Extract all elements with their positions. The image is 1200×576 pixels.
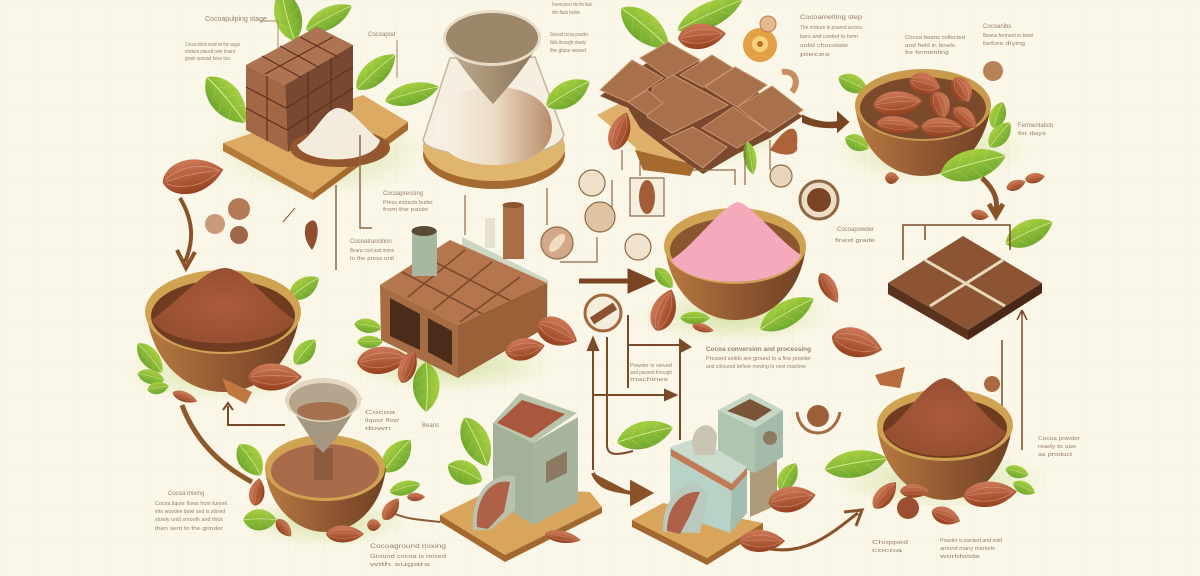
callout: block note: mixture placed over board [185, 49, 235, 55]
panel: bowl of beans [830, 61, 1046, 222]
icon: machine pods [739, 459, 818, 552]
icon: loose beans [885, 171, 1046, 222]
arrow: pod to left bowl [177, 198, 195, 268]
icon: press chimneys and pipes [462, 202, 548, 315]
callout: grinding note: Press extracts butter [383, 200, 433, 206]
callout: funnel note: the glass vessel [550, 48, 586, 54]
callout: bottom left note: down [365, 426, 391, 432]
arrow: press to pink bowl [579, 272, 650, 290]
panel: grinder machine one [440, 393, 676, 562]
arrow: machine to bowl [770, 510, 862, 550]
callout: right notes: Cocoa powder [1038, 436, 1080, 442]
callout: right notes: ready to use [1038, 444, 1076, 450]
callout: centre notes: Pressed solids are ground to a fine powder [706, 356, 811, 362]
callout: right notes: around many markets [940, 546, 996, 552]
panel: grinder arrows [588, 315, 690, 503]
callout: centre notes: Cocoa conversion and processing [706, 346, 811, 353]
callout: grinding note: to the press unit [350, 256, 395, 262]
callout: right notes: worldwide [940, 554, 980, 560]
callout: bottom left note: with sugars [370, 562, 431, 568]
callout: centre notes: finest grade [835, 238, 875, 244]
icon: pod gear and nuts near bars [604, 16, 797, 176]
callout: centre notes: and passed through [630, 370, 672, 376]
callout: funnel note: into flask below [552, 10, 580, 16]
callout: bottom left note: then sent to the grinder [155, 526, 223, 532]
icon: leaves behind block [195, 0, 442, 132]
callout: centre notes [630, 227, 875, 383]
callout: beans notes: and held in bowls [905, 43, 956, 49]
callout: beans notes: Beans ferment in bowl [983, 33, 1033, 39]
callout: bottom left note [155, 410, 446, 568]
callout: block note: grain spread here too [185, 56, 230, 62]
callout: funnel note: Ground cocoa powder [550, 32, 588, 38]
panel: bottom left funnel bowl [230, 378, 425, 547]
callout: block note: Cocoa block rests on the sugar [185, 42, 240, 48]
icon: beans in bowl [872, 69, 982, 136]
arrow: curved bowl to funnel [182, 405, 252, 482]
arrow: funnel back up to bowl [223, 403, 285, 425]
icon: leaf right of funnel [540, 71, 596, 117]
callout: bars note: Cocoamelting step [800, 14, 862, 21]
callout: grinding note: Cocoatransition [350, 239, 392, 245]
callout: bottom left note: liquor flow [365, 418, 400, 424]
panel: small icons left [205, 198, 318, 250]
callout: beans notes: Fermentation [1018, 123, 1053, 129]
icon: large leaf over bowl [936, 141, 1010, 188]
callout: funnel note: falls through slowly [550, 40, 586, 46]
callout: right notes [872, 436, 1080, 560]
callout: bottom left note: Ground cocoa is mixed [370, 554, 446, 560]
panel: glass funnel on wood disc [423, 10, 596, 189]
icon: leaves above bars [612, 0, 748, 59]
panel: brick press [345, 202, 583, 412]
panel: left powder bowl [125, 268, 324, 406]
callout: centre notes: machines [630, 377, 669, 383]
callout: funnel note [550, 2, 592, 54]
callout: funnel note: Funnel pours into the flask [552, 2, 592, 8]
chocolate pieces [600, 42, 803, 168]
arrow: beans to chocolate squares [982, 178, 1003, 216]
icon: pink bowl pods and leaves [645, 263, 886, 364]
callout: bars note: bars and cooled to form [800, 34, 858, 40]
panel: grinder machine two [632, 393, 818, 565]
chocolate slab base [600, 48, 803, 174]
callout: grinding note: Cocoapressing [383, 191, 423, 197]
callout: beans notes: for days [1018, 131, 1047, 137]
callout: square connectors [903, 225, 1027, 450]
icon: funnel bowl leaves [230, 432, 422, 530]
callout: bottom left note: Cocoa mixing [168, 491, 204, 497]
callout: grinding note: Beans cool and move [350, 248, 394, 254]
callout: right notes: Chopped [872, 540, 908, 546]
callout: block note [185, 16, 397, 78]
panel: bottom right powder bowl [822, 367, 1050, 529]
callout: block note: Cocoapod [368, 32, 395, 38]
callout: bottom left note: Cocoa liquor flows from funnel [155, 501, 227, 507]
icon: funnel bowl pods [247, 477, 425, 542]
text: press label: Beans [422, 423, 439, 429]
callout: bottom left note: into wooden bowl and is stirred [155, 509, 225, 515]
callout: bottom left note: slowly until smooth and thick [155, 517, 224, 523]
panel: chocolate squares [888, 211, 1058, 340]
callout: right notes: Powder is packed and sold [940, 538, 1002, 544]
icon: leaf right of squares [1000, 211, 1058, 255]
callout: beans notes: Cocoanibs [983, 24, 1011, 30]
panel: chocolate block on board [195, 0, 442, 200]
board under bars [597, 103, 697, 172]
icon: round seed badge [797, 405, 840, 433]
panel: chocolate bars [597, 0, 803, 176]
callout: beans notes [905, 24, 1053, 137]
icon: bowl leaves [835, 69, 1017, 156]
callout: grinding note [336, 135, 433, 270]
arrow: funnel to machine [395, 514, 440, 522]
icon: left bowl leaves [131, 270, 324, 396]
callout: beans notes: for fermenting [905, 50, 949, 56]
callout: block note: Cocoapulping stage [205, 16, 267, 23]
panel: pink powder bowl [635, 202, 886, 364]
callout: centre notes: Cocoapowder [837, 227, 874, 233]
panel: small process icons centre [465, 140, 838, 331]
callout: right notes: cocoa [872, 548, 902, 554]
arrow: bars to bowl [803, 113, 848, 131]
icon: press pods and leaves [353, 310, 583, 412]
callout: bars note [800, 14, 862, 58]
icon: bottom right pods [868, 367, 1018, 529]
callout: bottom left note: Cocoa [365, 410, 395, 416]
callout: bars note: solid chocolate [800, 43, 848, 49]
callout: bottom left note: Cocoaground mixing [370, 544, 446, 550]
callout: bars note: The mixture is poured across [800, 25, 862, 31]
icon: bowl right leaves [822, 445, 1038, 499]
callout: right notes: as product [1038, 452, 1073, 458]
callout: bars note: pieces [800, 52, 831, 58]
callout: beans notes: before drying [983, 41, 1025, 47]
callout: beans notes: Cocoa beans collected [905, 35, 965, 41]
callout: grinding note: from the paste [383, 207, 428, 213]
callout: centre notes: and coloured before moving to next machine [706, 364, 806, 370]
callout: centre notes: Powder is sieved [630, 363, 672, 369]
icon: grinder leaves [443, 412, 676, 491]
icon: large cocoa pod left [159, 153, 227, 199]
